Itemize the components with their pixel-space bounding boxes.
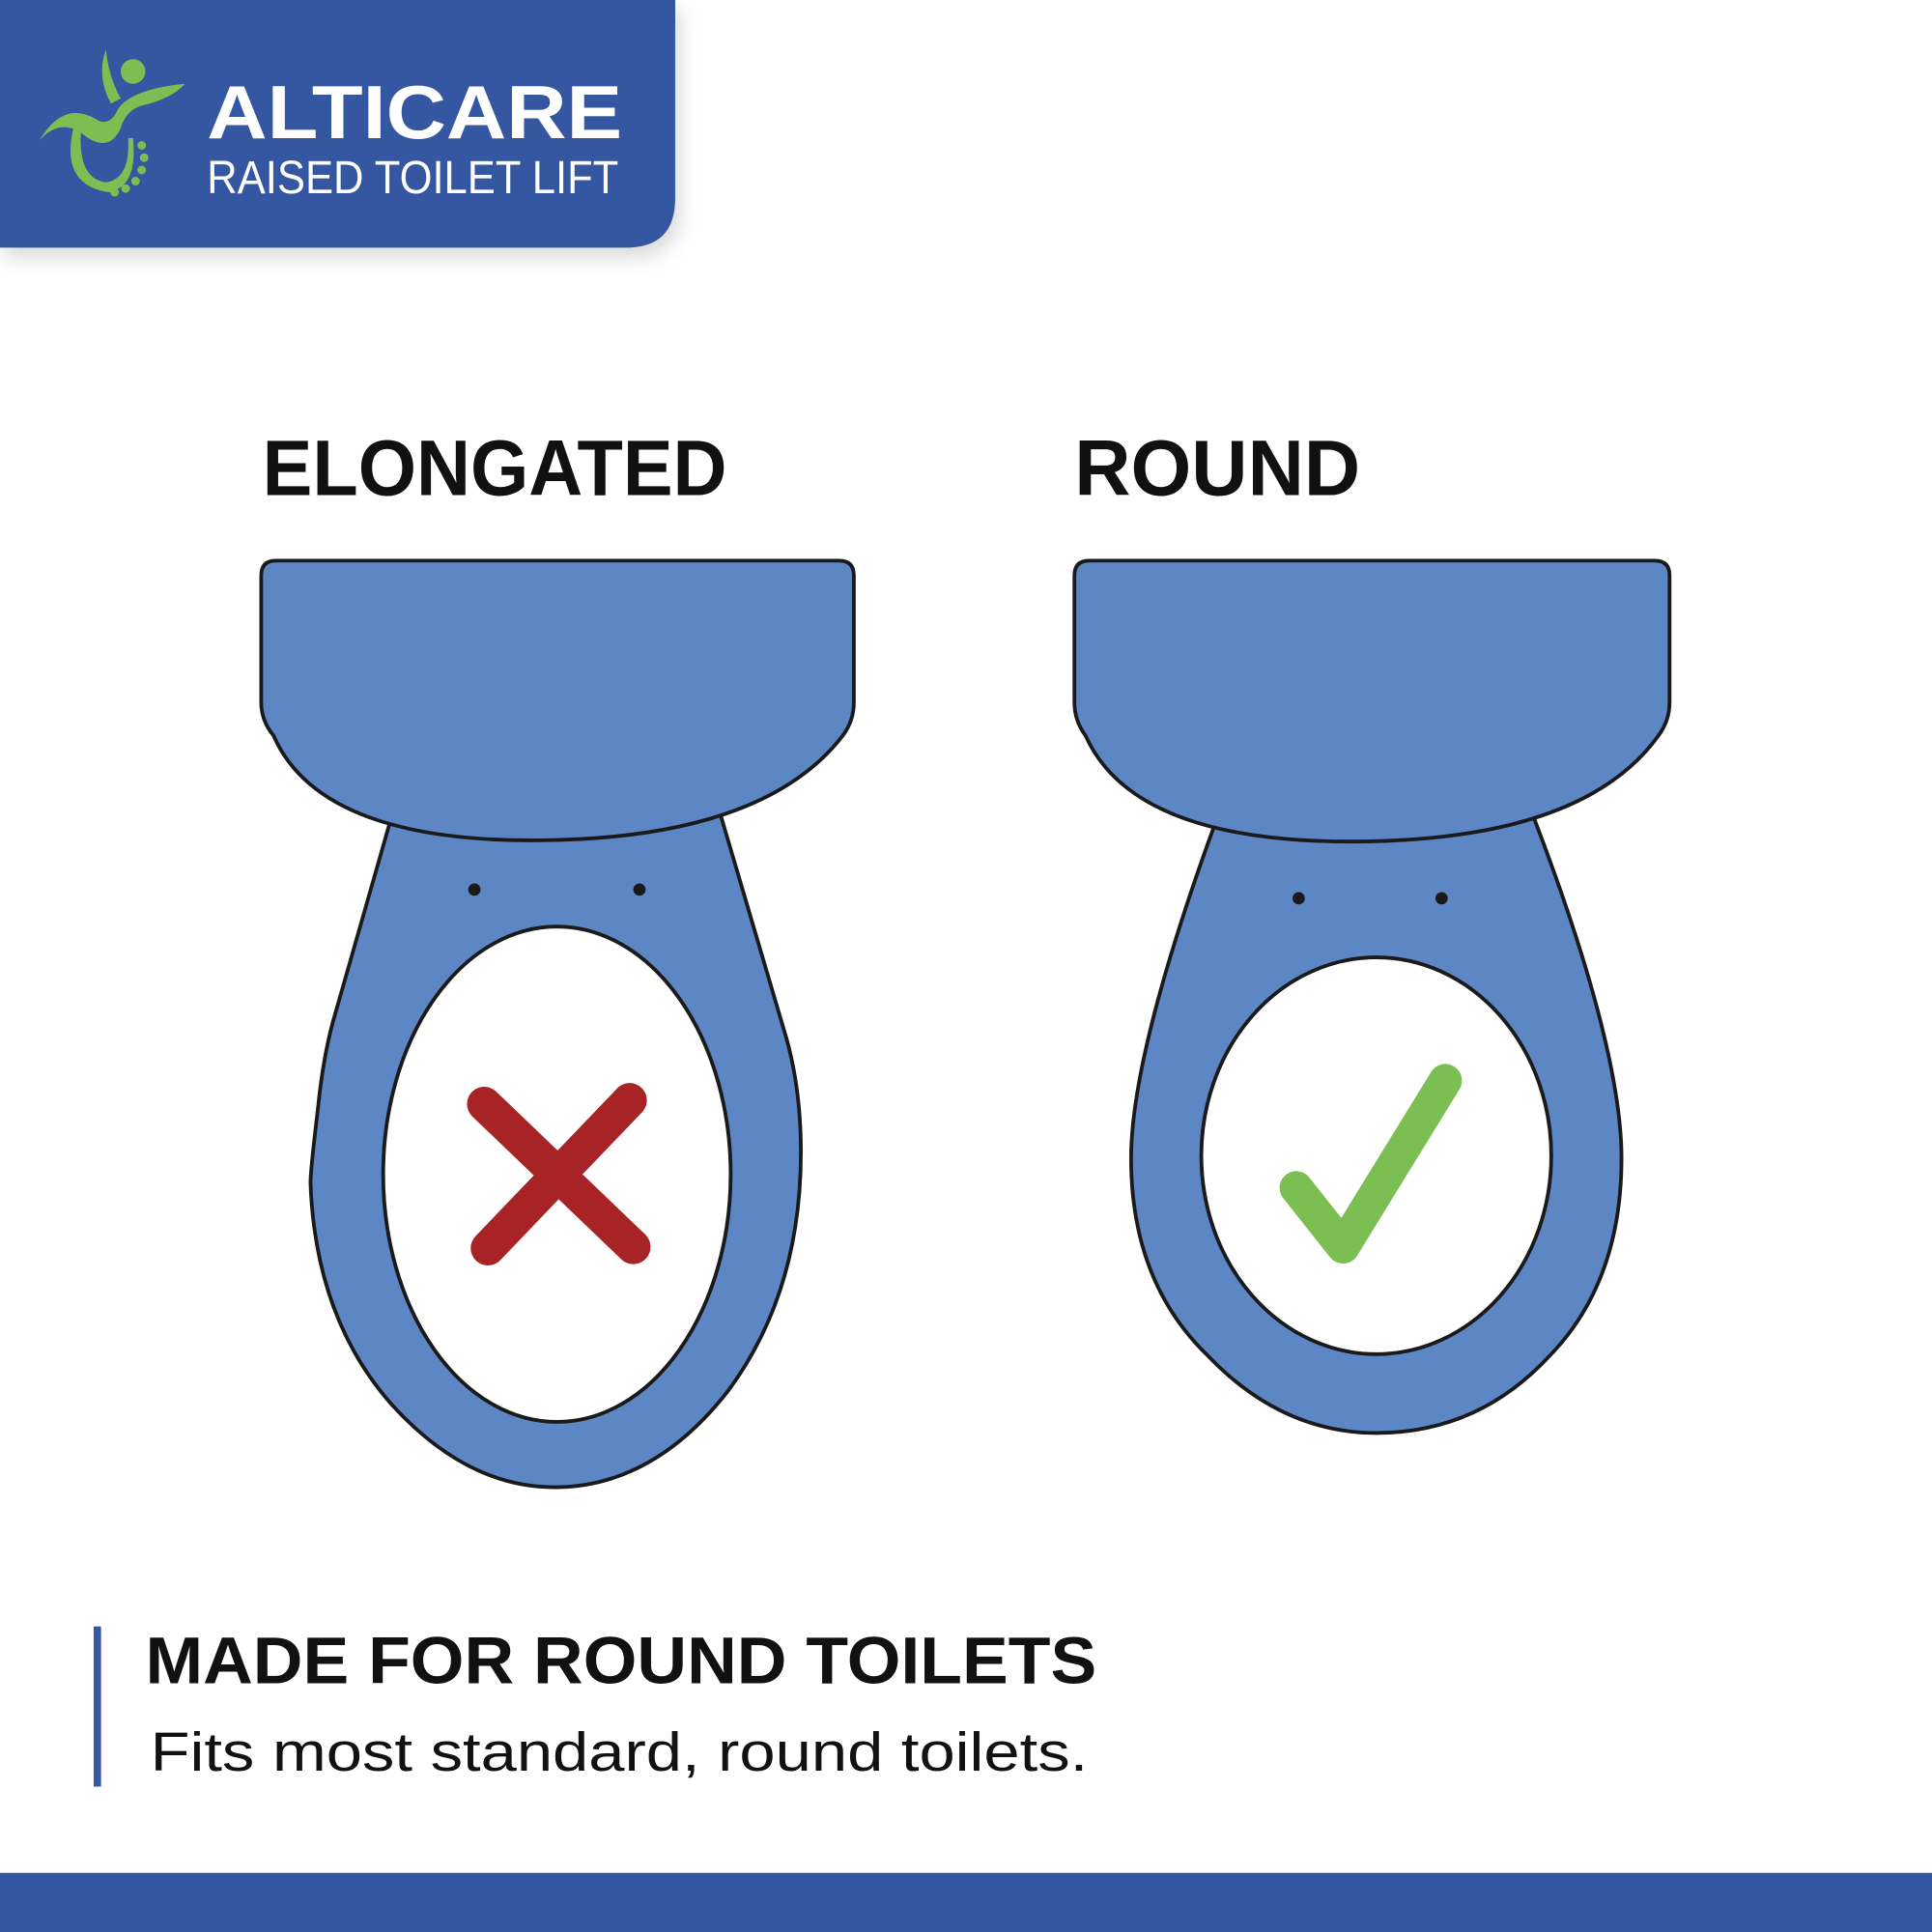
heading: round: ROUND [1074, 425, 1360, 513]
toilet: round [1074, 560, 1669, 1433]
callout heading: MADE FOR ROUND TOILETS [146, 1623, 1096, 1697]
header: brand panel [0, 0, 675, 247]
icon: green check [1296, 1081, 1445, 1247]
toilet: elongated [261, 560, 854, 1488]
heading: elongated: ELONGATED [263, 425, 727, 513]
icon: altricare logo [40, 49, 185, 196]
footer bar [0, 1873, 1932, 1932]
callout text: Fits most standard, round toilets. [151, 1721, 1088, 1782]
brand subtitle: RAISED TOILET LIFT [207, 152, 618, 204]
brand name: ALTICARE [207, 71, 622, 155]
callout: made for round toilets [94, 1623, 1096, 1786]
icon: red cross [484, 1100, 634, 1248]
